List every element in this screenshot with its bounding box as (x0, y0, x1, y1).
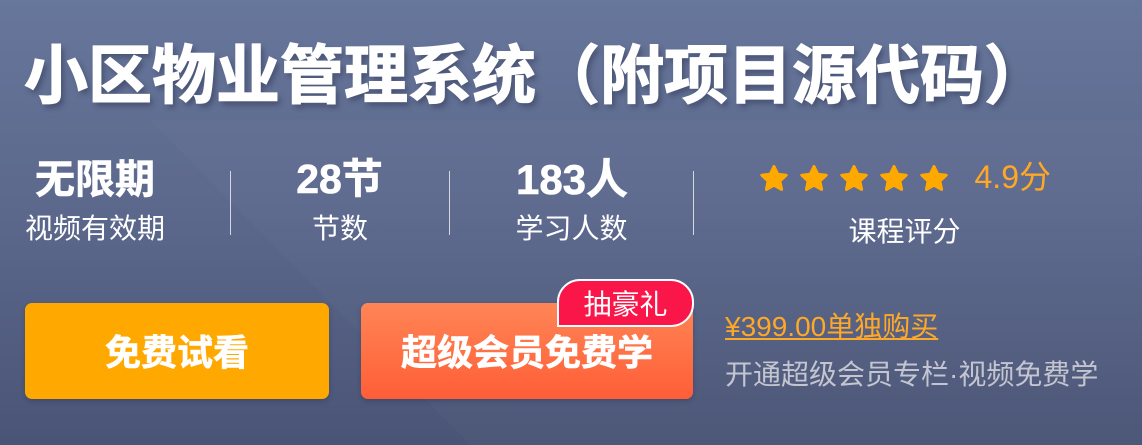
icon: five rating stars (760, 164, 948, 191)
stat: learner count: 学习人数 (515, 213, 628, 244)
button: super member (361, 303, 693, 399)
button: free preview: 免费试看 (105, 332, 249, 373)
stat: validity period (25, 158, 165, 244)
stat: lesson count: 28节 (296, 156, 383, 202)
membership note: 开通超级会员专栏·视频免费学 (725, 359, 1098, 390)
stat: lesson count: 节数 (312, 213, 368, 244)
stat: learner count (515, 156, 628, 244)
stat: course rating (760, 159, 1051, 247)
stat: lesson count (296, 156, 383, 244)
button: super member: 超级会员免费学 (401, 332, 653, 373)
title: 小区物业管理系统（附项目源代码） (24, 40, 1048, 112)
button: free preview (25, 303, 329, 399)
badge: lucky draw gift: 抽豪礼 (583, 289, 668, 320)
single purchase price link: ¥399.00单独购买 (725, 311, 938, 342)
stat: validity period: 视频有效期 (25, 213, 165, 244)
rating score: 4.9分 (974, 159, 1051, 195)
stat: learner count: 183人 (516, 156, 628, 203)
badge: lucky draw gift (557, 279, 694, 327)
stat: validity period: 无限期 (35, 158, 155, 202)
rating label: 课程评分 (848, 216, 961, 247)
